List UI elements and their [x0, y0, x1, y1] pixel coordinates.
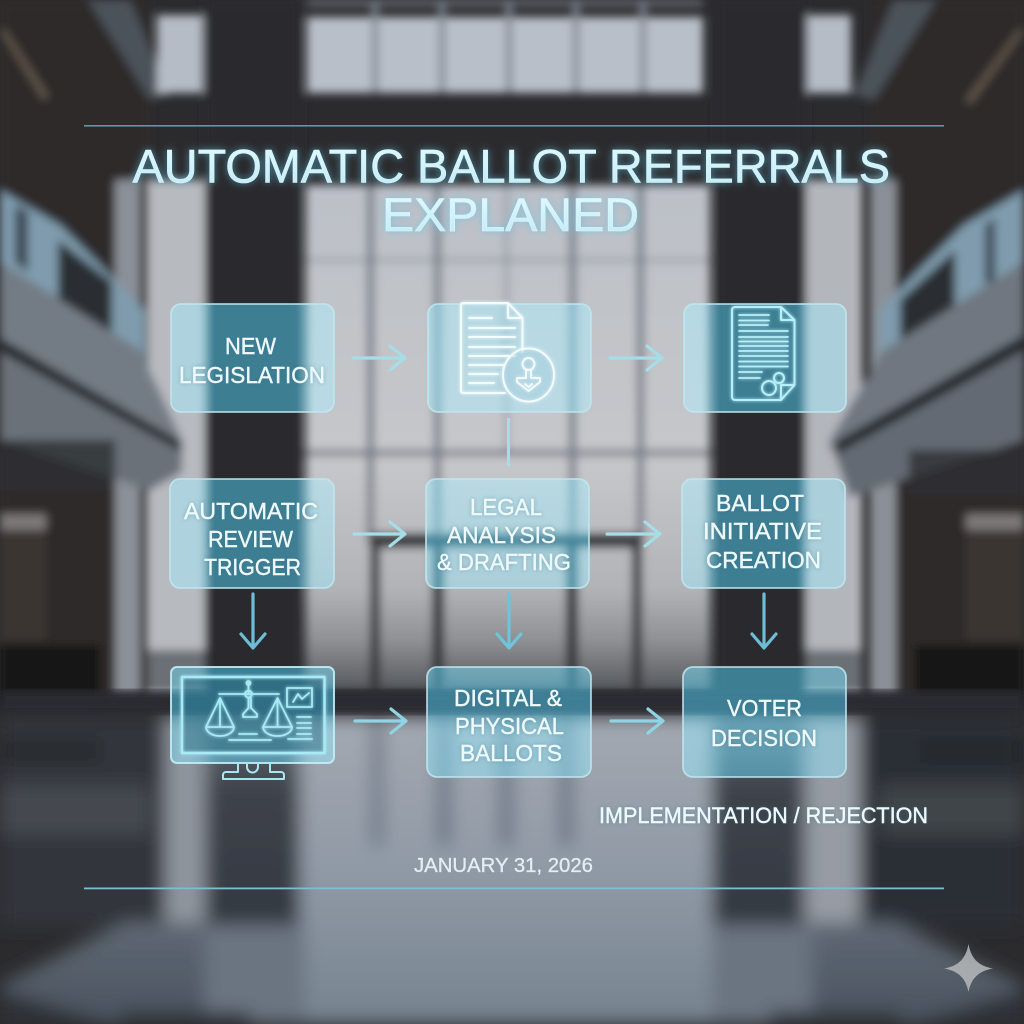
arrow: monitor to ballots	[355, 709, 406, 733]
arrow: legal analysis down to ballots	[497, 594, 521, 648]
panel: digital and physical ballots: PHYSICAL	[455, 713, 564, 739]
icon: document and stamp	[461, 303, 554, 402]
panel: policy document icon	[684, 304, 846, 412]
icon: sparkle watermark	[944, 944, 993, 992]
panel: legal analysis and drafting: LEGAL	[470, 494, 542, 520]
panel: automatic review trigger: REVIEW	[208, 526, 294, 552]
panel: new legislation	[171, 304, 334, 412]
panel: monitor with scales of justice	[171, 667, 334, 779]
arrow: new legislation to document	[353, 346, 405, 370]
arrow: document to policy document	[610, 346, 662, 370]
panel: automatic review trigger	[170, 479, 334, 588]
panel: ballot initiative creation: BALLOT	[716, 490, 804, 516]
panel: automatic review trigger: AUTOMATIC	[184, 498, 318, 524]
title: EXPLANED	[382, 188, 639, 241]
text: date: JANUARY 31, 2026	[414, 855, 593, 877]
arrow: review trigger to legal analysis	[354, 522, 405, 546]
panel: voter decision	[683, 667, 846, 777]
icon: scales and chart	[182, 677, 324, 753]
title: AUTOMATIC BALLOT REFERRALS	[132, 140, 890, 192]
panel: ballot initiative creation: INITIATIVE	[703, 518, 822, 544]
panel: new legislation: LEGISLATION	[179, 362, 325, 388]
bottom divider line	[84, 888, 944, 889]
icon: document with seal	[732, 307, 794, 400]
icon: monitor stand	[223, 763, 284, 779]
connector line: document to legal analysis	[507, 418, 510, 466]
title	[132, 140, 890, 241]
panel: digital and physical ballots	[427, 667, 591, 777]
panel: ballot initiative creation	[682, 479, 845, 588]
panel: ballot initiative creation: CREATION	[706, 547, 821, 573]
panel: digital and physical ballots: BALLOTS	[460, 740, 562, 766]
panel: document with stamp icon	[428, 303, 591, 412]
top divider line	[84, 125, 944, 127]
text: implementation or rejection: IMPLEMENTATION / REJECTION	[599, 803, 928, 828]
panel: voter decision: VOTER	[727, 695, 802, 721]
panel: new legislation: NEW	[225, 333, 277, 359]
panel: automatic review trigger: TRIGGER	[204, 554, 301, 580]
arrow: ballots to voter decision	[611, 709, 663, 733]
panel: legal analysis and drafting: ANALYSIS	[447, 522, 556, 548]
arrow: review trigger down to monitor	[241, 594, 265, 648]
arrow: ballot initiative down to voter decision	[752, 594, 776, 648]
arrow: legal analysis to ballot initiative	[607, 522, 660, 546]
panel: voter decision: DECISION	[711, 725, 817, 751]
panel: digital and physical ballots: DIGITAL &	[454, 685, 562, 711]
panel: legal analysis and drafting	[426, 479, 589, 588]
panel: legal analysis and drafting: & DRAFTING	[437, 549, 571, 575]
